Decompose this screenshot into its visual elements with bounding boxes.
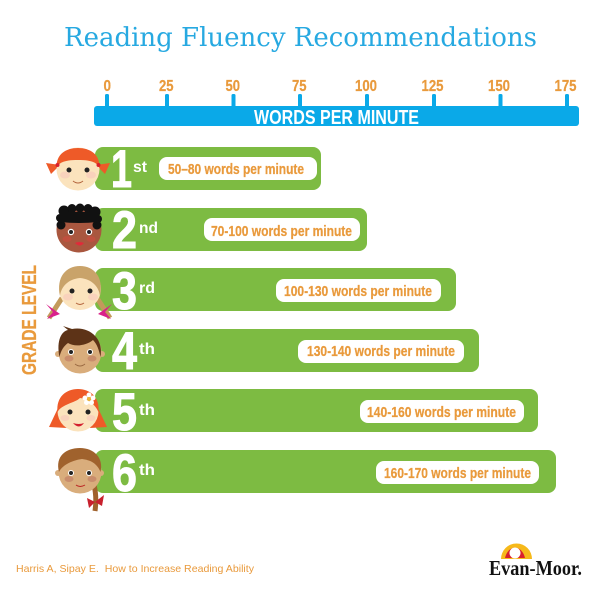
axis tick labels: 50 — [226, 78, 240, 95]
bar: grade 5 — [95, 383, 538, 442]
bar: grade 6: 6 — [112, 444, 137, 503]
icon: boy with brown hair — [55, 326, 105, 374]
bar: grade 6: 160-170 words per minute — [384, 466, 531, 482]
bar: grade 5: 5 — [112, 383, 137, 442]
bar: grade 1: 50–80 words per minute — [168, 162, 304, 178]
bar: grade 3 — [95, 262, 456, 321]
bar: grade 4: 4 — [112, 322, 137, 381]
bar: grade 6: th — [139, 462, 155, 479]
logo: Evan-Moor: Evan-Moor. — [489, 556, 582, 580]
bar: grade 2 — [95, 201, 367, 260]
axis bar — [94, 106, 579, 126]
logo: Evan-Moor — [489, 544, 582, 580]
bar: grade 6 — [95, 444, 556, 503]
bar: grade 4: 130-140 words per minute — [307, 344, 455, 360]
icon: girl with blond braids — [46, 266, 112, 319]
bar: grade 2: nd — [139, 220, 158, 237]
icon: boy with black curly hair — [56, 204, 102, 252]
bar: grade 3: 100-130 words per minute — [284, 284, 432, 300]
axis tick labels — [104, 78, 577, 95]
bar: grade 1: 1 — [111, 140, 132, 199]
bar: grade 1: st — [133, 159, 148, 176]
bar: grade 3: rd — [139, 280, 155, 297]
icon: girl with red pigtails — [46, 148, 110, 190]
bar: grade 2: 70-100 words per minute — [211, 224, 352, 240]
bar: grade 3: 3 — [112, 262, 137, 321]
y axis label: grade level: GRADE LEVEL — [19, 265, 41, 375]
bar: grade 4: th — [139, 341, 155, 358]
axis tick labels: 100 — [355, 78, 377, 95]
axis: words per minute — [94, 78, 579, 129]
axis tick labels: 150 — [488, 78, 510, 95]
bar: grade 5: 140-160 words per minute — [367, 405, 516, 421]
bar: grade 1 — [95, 140, 321, 199]
axis tick labels: 175 — [554, 78, 577, 95]
bar: grade 2: 2 — [112, 201, 137, 260]
axis ticks — [105, 94, 569, 108]
bar: grade 4 — [95, 322, 479, 381]
axis tick labels: 75 — [292, 78, 307, 95]
axis tick labels: 0 — [104, 78, 111, 95]
bar: grade 5: th — [139, 402, 155, 419]
source citation: Harris A, Sipay E. How to Increase Reading Ability — [16, 563, 255, 575]
axis tick labels: 25 — [159, 78, 174, 95]
title: Reading Fluency Recommendations — [64, 23, 537, 53]
icon: girl with red hair and flower — [49, 389, 107, 432]
axis tick labels: 125 — [422, 78, 444, 95]
icon: girl with brown braid — [55, 448, 104, 511]
axis title: WORDS PER MINUTE — [254, 107, 419, 129]
